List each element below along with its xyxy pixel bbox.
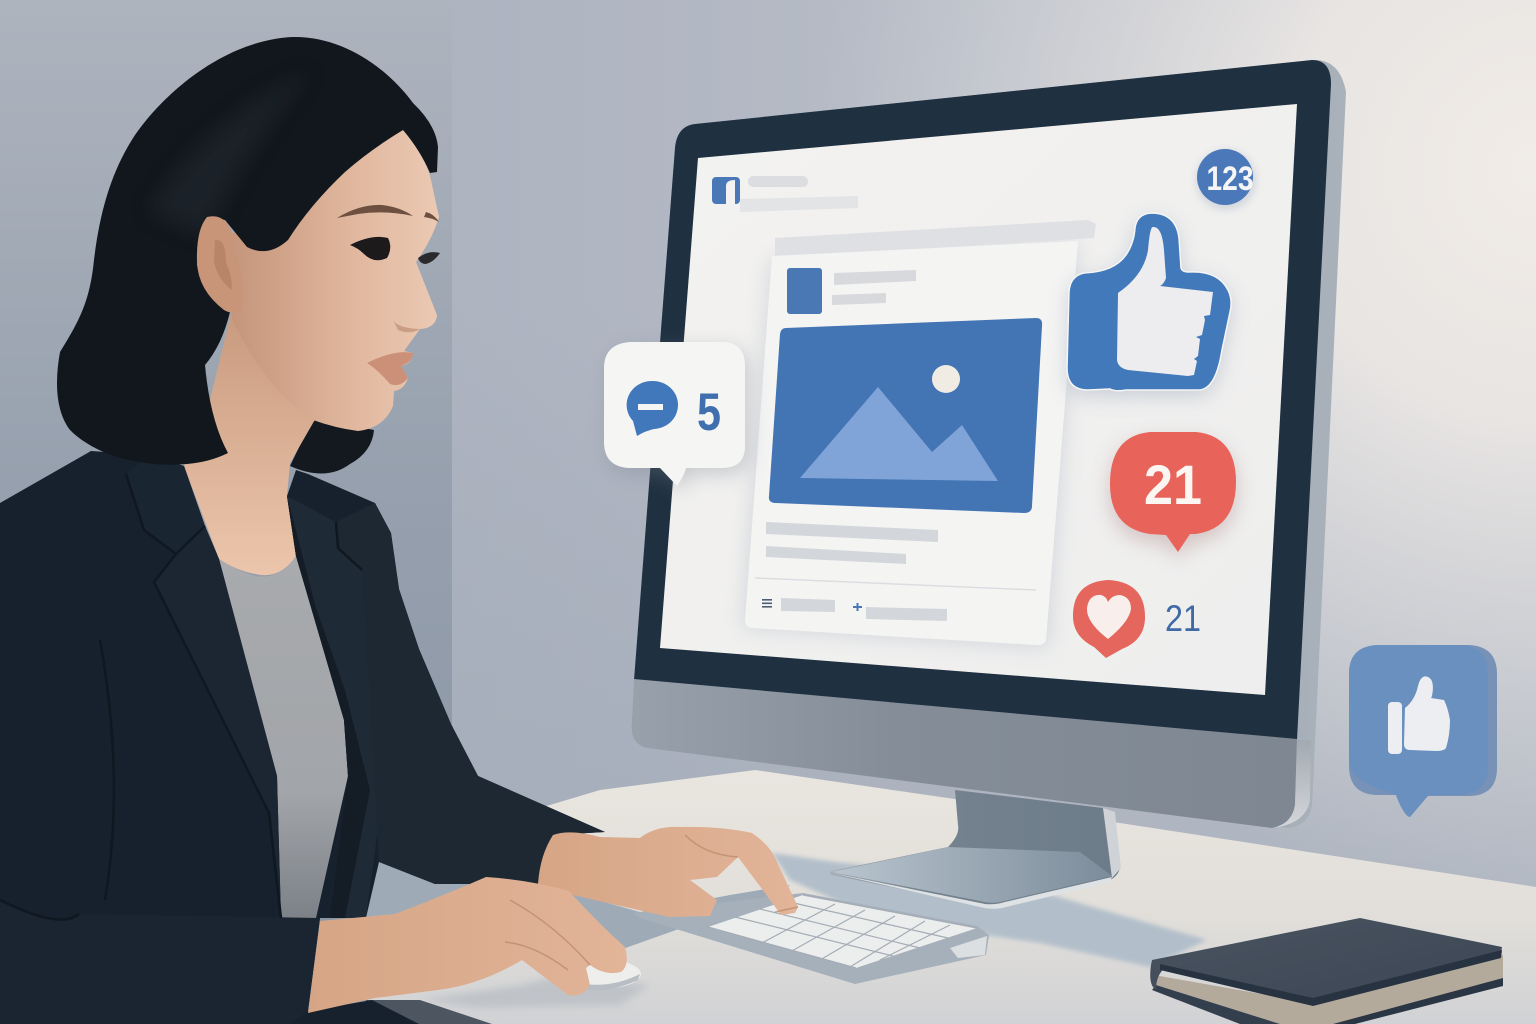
icon: large thumbs up — [1067, 213, 1231, 397]
callout: floating like bubble — [1349, 645, 1497, 817]
desk — [366, 770, 1536, 1024]
post action bar — [762, 598, 947, 621]
jacket — [0, 451, 605, 1024]
ear — [197, 216, 243, 312]
jacket sleeve — [0, 900, 320, 1024]
eyebrows — [337, 205, 439, 222]
post avatar — [787, 268, 822, 314]
icon: heart with count 21: 21 — [1165, 598, 1201, 639]
hair — [57, 37, 438, 465]
monitor stand — [830, 790, 1121, 909]
jacket lapels — [126, 455, 605, 918]
shirt — [219, 556, 348, 918]
icon: count badge 123: 123 — [1206, 160, 1254, 198]
nose shading — [392, 318, 420, 332]
mouse — [559, 959, 641, 990]
app header: logo and title bars — [712, 176, 858, 212]
post text lines — [766, 522, 938, 564]
monitor casing — [632, 60, 1346, 828]
monitor screen — [660, 104, 1297, 695]
neck — [184, 310, 330, 575]
icon: speech bubble — [627, 381, 678, 436]
icon: small thumbs up — [1388, 676, 1450, 754]
callout: red notification 21: 21 — [1144, 453, 1202, 516]
callout: comment bubble with count 5: 5 — [697, 383, 721, 442]
woman — [0, 37, 798, 1024]
face — [230, 130, 439, 431]
hair back — [290, 418, 374, 474]
callout: comment bubble with count 5 — [604, 342, 749, 492]
right hand on keyboard — [538, 827, 798, 917]
lips — [367, 352, 413, 385]
keyboard — [633, 893, 989, 984]
icon: count badge 123 — [1196, 149, 1256, 210]
post header lines — [832, 270, 916, 305]
eyes — [350, 237, 440, 264]
post card — [742, 220, 1096, 648]
left hand on mouse — [308, 877, 627, 1013]
monitor — [632, 60, 1346, 909]
callout: red notification 21 — [1110, 432, 1236, 560]
book — [1150, 918, 1503, 1024]
monitor chin — [632, 679, 1297, 828]
icon: heart with count 21 — [1073, 580, 1201, 658]
post image — [769, 318, 1042, 513]
